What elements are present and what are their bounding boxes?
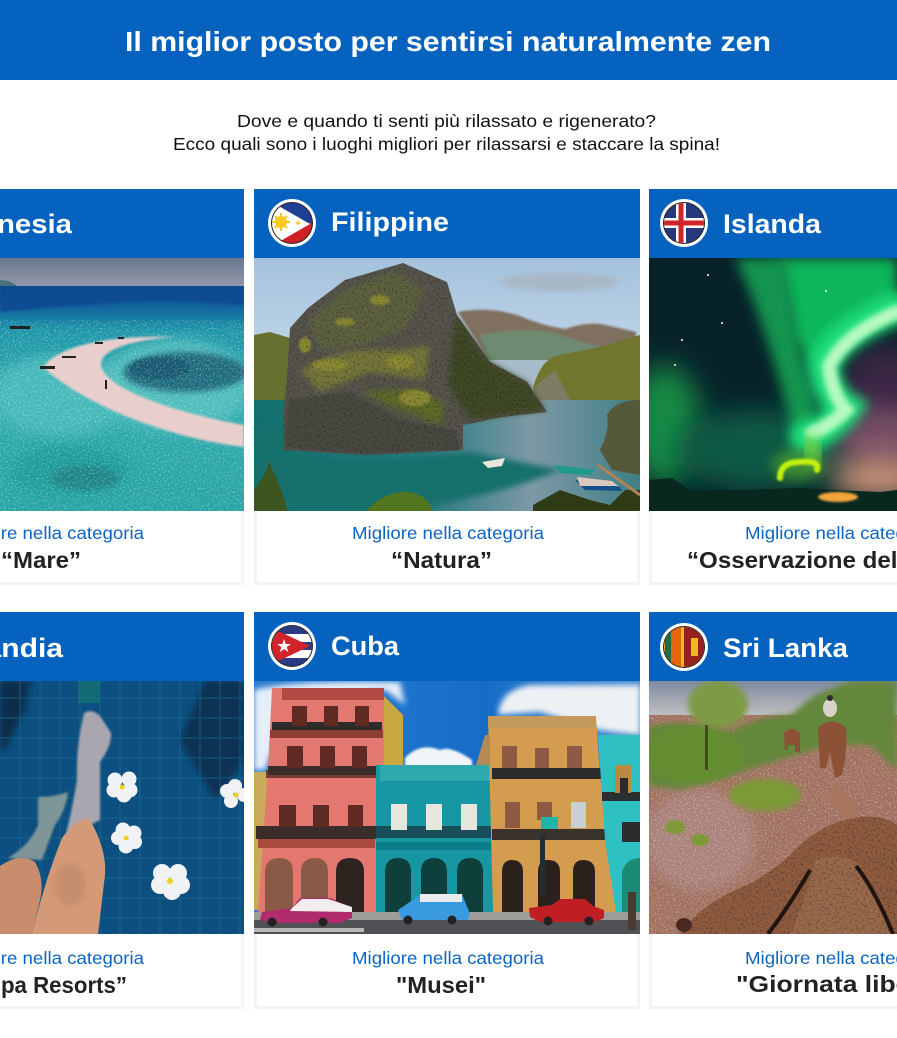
photo: elephant ride <box>645 680 897 934</box>
panel: Indonesia <box>0 189 250 585</box>
caption: Musei: Migliore nella categoria <box>352 948 544 968</box>
icon: Sri Lanka flag <box>660 623 708 671</box>
icon: flowers <box>106 772 251 900</box>
heading: Sri Lanka: Sri Lanka <box>723 633 849 663</box>
caption: Musei <box>352 948 544 998</box>
intro text: Dove e quando ti senti più rilassato e rigenerato? <box>237 111 656 131</box>
small elephants <box>784 722 846 778</box>
panel: Cuba <box>254 612 640 1009</box>
photo: feet in pool <box>0 681 251 934</box>
photo: Havana street <box>254 681 640 934</box>
icon: Cuba flag: ★ <box>276 636 292 656</box>
caption: Natura: Migliore nella categoria <box>352 523 544 543</box>
panel: Filippine <box>254 189 640 585</box>
caption: Musei: "Musei" <box>396 972 486 998</box>
heading: Islanda: Islanda <box>723 209 822 239</box>
caption: Natura <box>352 523 544 573</box>
icon: Philippines flag <box>268 199 316 247</box>
photo: northern lights <box>629 258 897 511</box>
panel: Tailandia <box>0 612 251 1009</box>
photo: limestone lagoon <box>254 258 640 511</box>
caption: Osservazione <box>687 523 897 573</box>
orange building <box>488 716 616 912</box>
teal building <box>376 765 494 912</box>
caption: Mare: “Mare” <box>1 547 81 573</box>
heading: Filippine: Filippine <box>331 207 449 237</box>
right teal building <box>598 735 640 912</box>
caption: Mare <box>0 523 144 573</box>
title banner <box>0 0 897 80</box>
caption: Spa Resorts <box>0 948 144 998</box>
title: Il miglior posto per sentirsi naturalmente zen <box>125 26 771 57</box>
intro text: Ecco quali sono i luoghi migliori per rilassarsi e staccare la spina! <box>173 134 720 154</box>
heading: Cuba: Cuba <box>331 631 400 661</box>
icon: Iceland flag <box>660 199 708 247</box>
road <box>254 912 640 920</box>
yellow building <box>384 696 403 765</box>
intro text <box>173 111 720 154</box>
panel: Sri Lanka <box>645 612 897 1009</box>
caption: Natura: “Natura” <box>391 547 492 573</box>
panel: Islanda <box>629 189 897 585</box>
caption: Giornata libera <box>736 948 897 997</box>
big elephant <box>680 817 897 934</box>
cars <box>260 894 604 926</box>
icon: Cuba flag <box>268 622 316 670</box>
photo: beach sandbar <box>0 258 250 511</box>
